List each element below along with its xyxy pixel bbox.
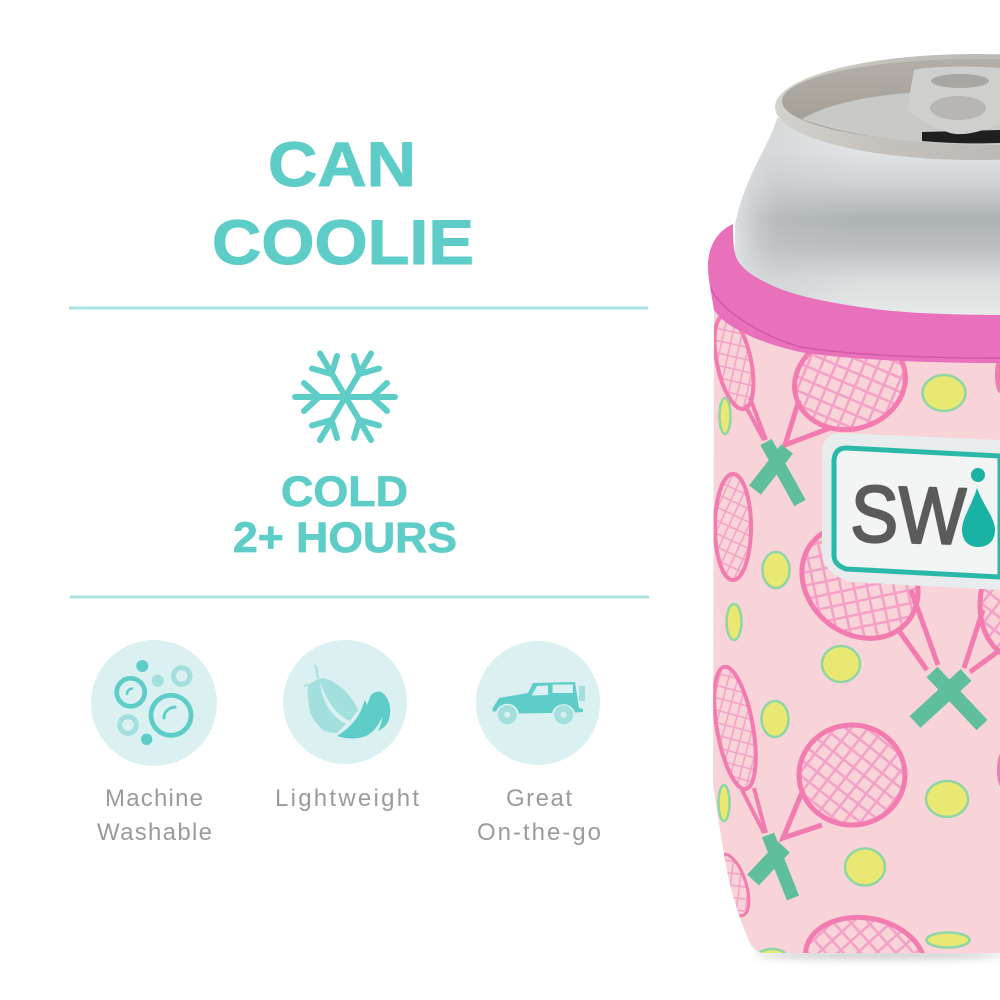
tennis rackets bottom partial [711,357,1000,1000]
tennis rackets middle pair [715,474,1000,725]
feature: great on-the-go [476,641,601,846]
feature: lightweight [275,640,419,812]
title: CAN [268,130,416,200]
tennis rackets lower pair [707,664,905,898]
logo droplet [962,468,995,547]
icon: snowflake [295,354,395,440]
icon: feather [283,640,407,764]
aluminum can [735,54,1000,322]
divider [69,306,648,310]
label: lightweight: Lightweight [275,785,419,812]
tennis rackets top pair [707,312,916,503]
title [212,130,474,278]
title: COOLIE [212,208,474,278]
icon: jeep [476,641,600,765]
label: great on-the-go: Great [506,785,572,812]
ground shadow [755,951,1000,959]
feature: machine washable [91,640,217,846]
coolie pink collar [708,224,1000,363]
label: great on-the-go [477,785,601,846]
product: can in coolie [700,54,1000,1000]
icon: bubbles [91,640,217,766]
coolie body [713,305,1000,953]
label: great on-the-go: On-the-go [477,819,601,846]
cold duration text: COLD [281,468,408,516]
cold duration text: 2+ HOURS [233,514,457,562]
swig logo patch [822,433,1000,590]
label: machine washable [97,785,212,846]
tennis balls [718,375,970,963]
cold duration text [233,468,457,562]
logo wordmark: SW [850,469,967,561]
divider [70,596,649,598]
label: machine washable: Machine [105,785,203,812]
label: machine washable: Washable [97,819,212,846]
